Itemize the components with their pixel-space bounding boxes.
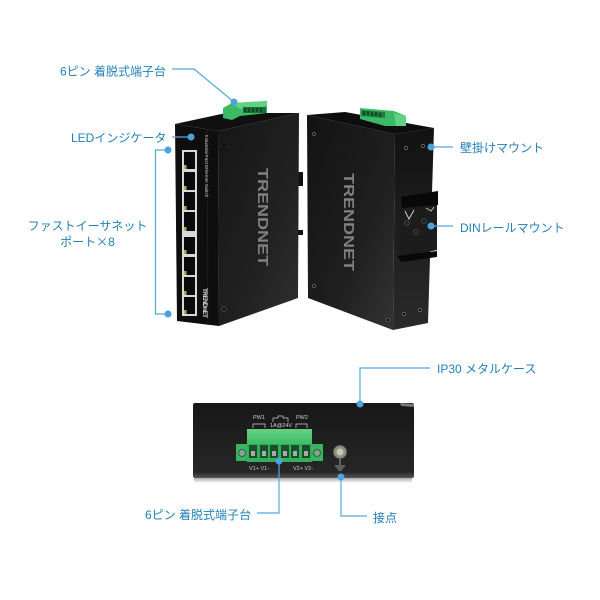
callout: top terminal block — [60, 64, 238, 106]
top surface — [307, 112, 434, 134]
callout: IP30 metal case — [356, 362, 536, 408]
terminal block — [236, 429, 323, 462]
silk labels: V2+ V2- — [293, 466, 313, 472]
silk labels: PW1 — [253, 415, 265, 421]
callout: grounding contact — [338, 474, 397, 525]
device: left switch front view: TRENDnET — [201, 288, 208, 318]
silk labels: PW2 — [296, 415, 308, 421]
mount screw holes — [312, 132, 425, 322]
shadow — [194, 478, 412, 483]
top surface — [175, 113, 299, 131]
callout: Ethernet ports — [28, 146, 172, 318]
label: IP30 メタルケース — [437, 362, 536, 376]
large side panel — [307, 115, 395, 330]
label: ファストイーサネット — [28, 219, 147, 233]
silk labels: 1A@24V — [270, 423, 292, 429]
terminal block: right switch — [360, 108, 406, 126]
device: right switch rear view — [307, 108, 438, 330]
label: LEDインジケータ — [71, 131, 166, 145]
callout: wall mount — [428, 140, 544, 155]
case body — [193, 403, 414, 478]
logo: side panel: TRENDNET — [254, 168, 270, 266]
DIN clip peeking behind — [298, 172, 303, 186]
ground screw — [333, 445, 347, 470]
silk labels — [249, 415, 313, 472]
label: 接点 — [373, 510, 397, 525]
ethernet ports ×8 — [182, 150, 197, 316]
callout: LED indicator — [71, 131, 194, 145]
front panel — [175, 124, 219, 326]
side panel — [218, 113, 299, 326]
screws — [222, 143, 226, 147]
silk labels: V1+ V1- — [249, 466, 269, 472]
logo: side panel: TRENDNET — [340, 173, 356, 271]
device: switch top view — [193, 403, 414, 483]
label: 壁掛けマウント — [460, 140, 544, 155]
callout: bottom terminal block — [145, 458, 282, 522]
case notch — [400, 403, 414, 407]
DIN rail mount — [397, 191, 438, 262]
terminal block: left switch — [223, 101, 267, 120]
callout: DIN rail mount — [428, 221, 565, 235]
front labels: Industrial Fast Ethernet Switch — [204, 135, 209, 198]
rear panel — [393, 128, 434, 330]
callout: Ethernet ports: ポート×8 — [60, 233, 115, 250]
label: 6ピン 着脱式端子台 — [145, 507, 251, 522]
label: 6ピン 着脱式端子台 — [60, 64, 166, 78]
label: DINレールマウント — [460, 221, 565, 235]
device: left switch front view — [175, 101, 303, 326]
